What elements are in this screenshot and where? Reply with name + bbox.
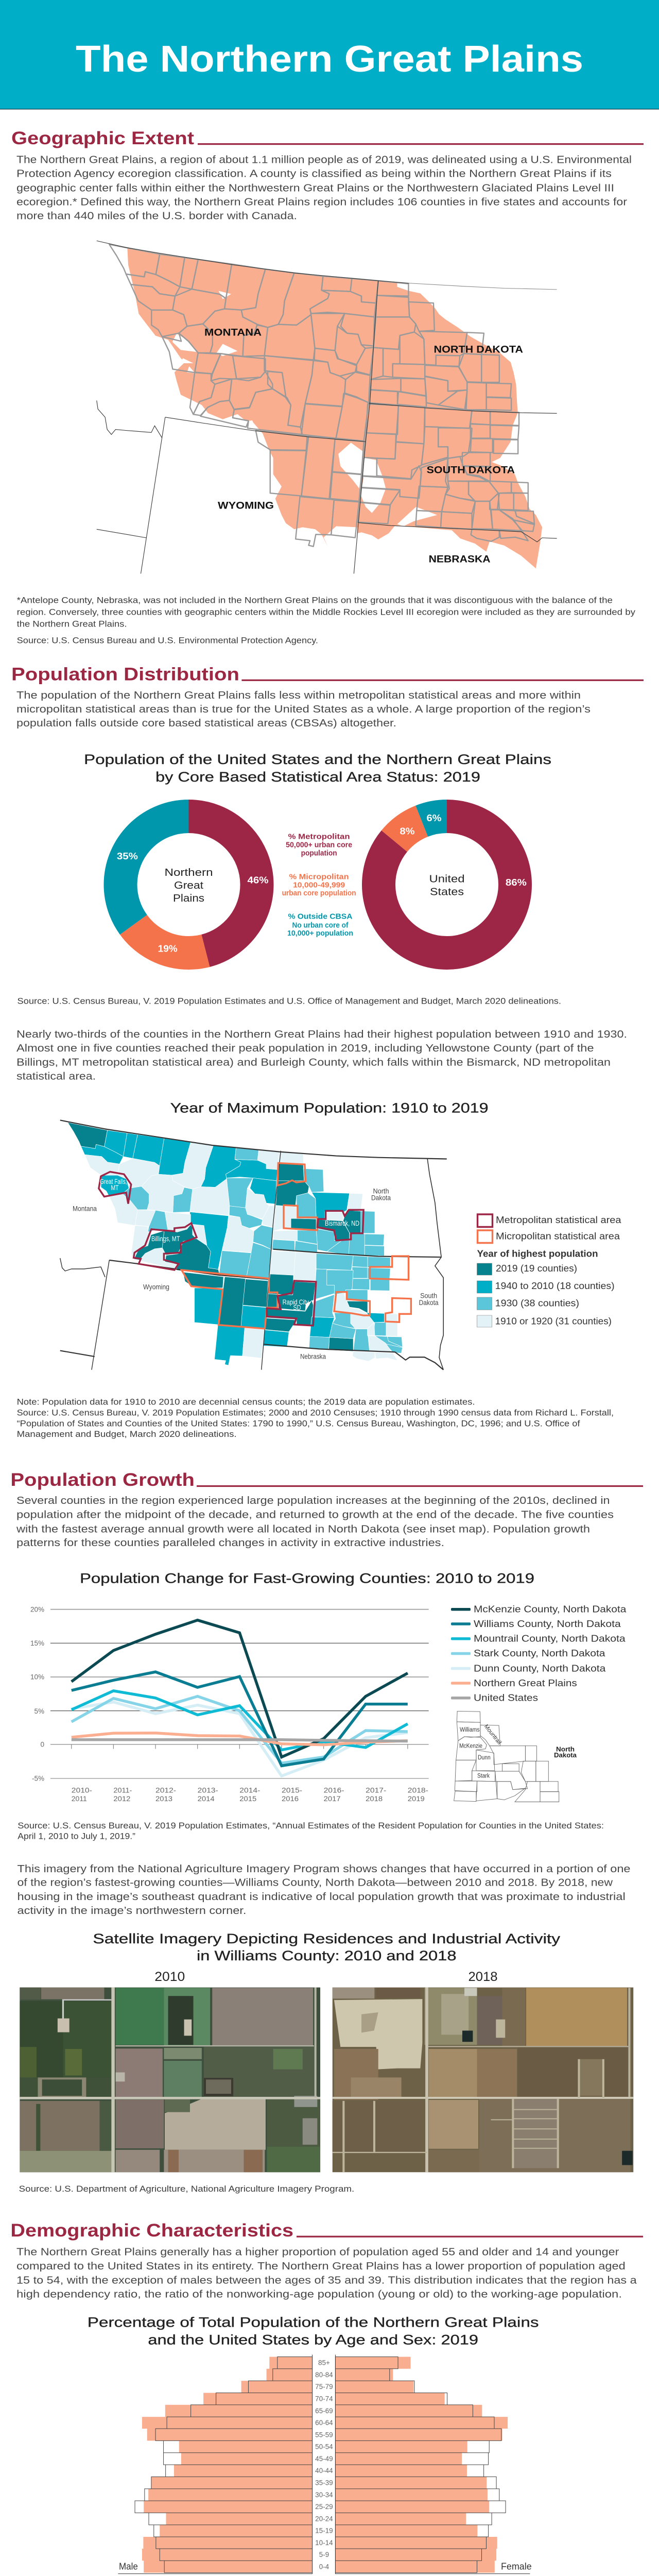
y axis labels: -5% xyxy=(32,1775,44,1783)
inset labels: Dunn xyxy=(478,1755,491,1761)
chart title: population change: Population Change for Fast-Growing Counties: 2010 to 2019 xyxy=(80,1570,534,1586)
year labels: 2018 xyxy=(469,1970,497,1984)
state labels xyxy=(204,328,523,565)
donut legend: No urban core of xyxy=(292,921,349,929)
donut legend: 10,000-49,999 xyxy=(293,880,345,889)
inset counties xyxy=(454,1711,559,1802)
map legend: year of highest population: Year of highest population xyxy=(477,1248,598,1259)
note and source: maximum population xyxy=(17,1397,614,1439)
text block: maximum population: Almost one in five counties reached their peak population in 2019, including Yellowstone County (part of the xyxy=(16,1043,594,1054)
source: line chart: April 1, 2010 to July 1, 2019.” xyxy=(18,1832,135,1841)
metropolitan outlines xyxy=(99,1172,363,1326)
state labels: NORTH DAKOTA xyxy=(433,344,523,355)
donut legend: % Metropolitan xyxy=(288,832,350,841)
text block: maximum population: Nearly two-thirds of the counties in the Northern Great Plains had their highest population between 1910 and 1930. xyxy=(16,1029,627,1040)
x axis labels: 2016 xyxy=(282,1795,299,1803)
donut chart: United States: United xyxy=(429,874,464,885)
y axis labels xyxy=(30,1605,44,1783)
age labels: 75-79 xyxy=(315,2383,333,2391)
footnote: Antelope County: region. Conversely, three counties with geographic centers within the Middle Rockies Level III ecoregion were included as they are surrounded by xyxy=(17,607,636,617)
footnote: Antelope County: *Antelope County, Nebraska, was not included in the Northern Great Plains on the grounds that it was discontiguous with the balance of the xyxy=(17,595,613,605)
y axis labels: 15% xyxy=(30,1639,44,1647)
line chart legend xyxy=(451,1604,627,1703)
state labels: MONTANA xyxy=(204,328,262,338)
text block: imagery: This imagery from the National Agriculture Imagery Program shows changes that have occurred in a portion of one xyxy=(18,1863,630,1875)
footnote: Antelope County: the Northern Great Plains. xyxy=(17,619,127,629)
age labels: 5-9 xyxy=(319,2551,329,2558)
age labels: 15-19 xyxy=(315,2527,333,2535)
donut legend: 50,000+ urban core xyxy=(286,841,352,849)
footnote: Antelope County xyxy=(17,595,636,646)
age labels: 65-69 xyxy=(315,2407,333,2415)
text block: demographics: 15 to 54, with the exception of males between the ages of 35 and 39. This distribution indicates that the region has a xyxy=(16,2275,637,2286)
year labels xyxy=(154,1970,497,1984)
line chart legend: Williams County, North Dakota xyxy=(474,1619,621,1629)
text block: maximum population xyxy=(16,1029,627,1082)
county fills by peak year xyxy=(67,1123,403,1365)
text block: geographic extent intro: more than 440 miles of the U.S. border with Canada. xyxy=(16,210,297,222)
x axis labels: 2015 xyxy=(239,1795,256,1803)
metro labels: Great Falls, xyxy=(100,1177,127,1185)
x axis labels: 2012- xyxy=(155,1787,176,1794)
line chart legend: Stark County, North Dakota xyxy=(474,1648,606,1658)
text block: population distribution intro xyxy=(16,690,591,729)
county outlines xyxy=(109,244,534,547)
sex labels: Female xyxy=(501,2562,532,2572)
y axis labels: 10% xyxy=(30,1673,44,1681)
donut chart: United States xyxy=(379,813,527,953)
inset labels: McKenzie xyxy=(459,1743,482,1750)
age labels: 0-4 xyxy=(319,2563,330,2571)
age labels: 70-74 xyxy=(315,2395,333,2403)
chart title: population pyramid xyxy=(88,2315,539,2347)
metro labels xyxy=(100,1177,359,1312)
heading: Demographic Characteristics: Demographic Characteristics xyxy=(10,2221,293,2241)
age labels: 30-34 xyxy=(315,2491,333,2499)
satellite image: 2018 xyxy=(333,1988,633,2172)
metro labels: Billings, MT xyxy=(151,1234,180,1243)
header banner xyxy=(0,0,659,109)
chart title: year of maximum population: Year of Maximum Population: 1910 to 2019 xyxy=(170,1100,489,1115)
satellite image: 2010 xyxy=(20,1988,320,2172)
state lines xyxy=(97,241,557,573)
age labels: 25-29 xyxy=(315,2503,333,2511)
x axis labels: 2013- xyxy=(198,1787,218,1794)
text block: geographic extent intro xyxy=(16,154,632,222)
text block: demographics: high dependency ratio, the ratio of the nonworking-age population (young or old) to the working-age population. xyxy=(16,2289,622,2300)
donut chart: Northern Great Plains: 46% xyxy=(247,875,269,885)
donut chart: Northern Great Plains: Northern xyxy=(165,867,213,878)
age labels: 80-84 xyxy=(315,2371,333,2379)
inset labels: Stark xyxy=(477,1773,490,1780)
donut chart: Northern Great Plains: Plains xyxy=(173,893,204,904)
text block: population distribution intro: The population of the Northern Great Plains falls less within metropolitan statistical areas and more within xyxy=(16,690,581,701)
x axis labels: 2015- xyxy=(282,1787,302,1794)
donut legend: % Outside CBSA xyxy=(288,912,353,921)
source: line chart xyxy=(18,1821,604,1841)
text block: maximum population: statistical area. xyxy=(16,1071,96,1082)
donut chart: Northern Great Plains: 19% xyxy=(158,944,178,954)
text block: population distribution intro: population falls outside core based statistical areas (CBSAs) altogether. xyxy=(16,718,396,729)
metro labels: Bismarck, ND xyxy=(325,1219,359,1227)
line chart legend: United States xyxy=(474,1693,538,1703)
sex labels xyxy=(119,2562,532,2572)
chart title: population pyramid: and the United States by Age and Sex: 2019 xyxy=(148,2332,478,2347)
x axis labels: 2011 xyxy=(72,1795,87,1803)
text block: geographic extent intro: geographic center falls within either the Northwestern Great Plains or the Northwestern Glaciated Plains Level III xyxy=(16,183,614,194)
population pyramid xyxy=(113,2355,534,2576)
line chart legend: Northern Great Plains xyxy=(474,1678,577,1688)
donut chart: United States: 6% xyxy=(426,813,442,823)
state labels: SOUTH DAKOTA xyxy=(427,465,515,476)
age labels: 50-54 xyxy=(315,2443,333,2451)
map labels: Dakota xyxy=(371,1194,391,1202)
map legend: year of highest population: 1910 or 1920 (31 counties) xyxy=(495,1316,612,1326)
footnote: Antelope County: Source: U.S. Census Bureau and U.S. Environmental Protection Agency. xyxy=(17,636,318,646)
y axis labels: 20% xyxy=(30,1605,44,1614)
line chart legend: Dunn County, North Dakota xyxy=(474,1663,606,1673)
year labels: 2010 xyxy=(154,1970,185,1984)
age labels: 55-59 xyxy=(315,2431,333,2438)
map labels: South xyxy=(420,1291,437,1299)
line chart: population change xyxy=(30,1605,429,1803)
x axis labels: 2017 xyxy=(324,1795,341,1803)
heading: Geographic Extent: Geographic Extent xyxy=(11,128,194,148)
x axis labels: 2011- xyxy=(113,1787,132,1794)
donut legend: urban core population xyxy=(282,889,356,897)
text block: population growth intro: Several counties in the region experienced large population increases at the beginning of the 2010s, declined in xyxy=(16,1495,610,1506)
grid lines and ticks xyxy=(50,1609,429,1778)
donut legend xyxy=(282,832,356,938)
heading: Demographic Characteristics xyxy=(10,2221,643,2241)
inset map: North Dakota xyxy=(454,1711,577,1802)
inset labels: Dakota xyxy=(554,1751,577,1759)
y axis labels: 0 xyxy=(40,1741,44,1749)
donut chart: Northern Great Plains: 35% xyxy=(117,851,138,861)
x axis labels: 2018- xyxy=(408,1787,428,1794)
text block: geographic extent intro: Protection Agency ecoregion classification. A county is classified as being within the Northern Great Plains if its xyxy=(16,168,612,180)
micropolitan outlines xyxy=(182,1163,411,1329)
map legend: year of highest population: 1940 to 2010 (18 counties) xyxy=(495,1281,615,1291)
x axis labels: 2012 xyxy=(113,1795,130,1803)
age labels: 40-44 xyxy=(315,2467,333,2475)
age labels xyxy=(315,2359,333,2571)
x axis labels: 2014- xyxy=(239,1787,260,1794)
inset labels: Mountrail xyxy=(483,1723,502,1746)
chart title: CBSA status: by Core Based Statistical Area Status: 2019 xyxy=(155,769,480,785)
map labels: Nebraska xyxy=(300,1352,326,1360)
x axis labels: 2016- xyxy=(324,1787,344,1794)
map labels: North xyxy=(373,1187,389,1195)
title: The Northern Great Plains xyxy=(76,39,583,80)
age labels: 45-49 xyxy=(315,2455,333,2463)
source: CBSA chart: Source: U.S. Census Bureau, V. 2019 Population Estimates and U.S. Office of Management and Budget, March 2020 delineations. xyxy=(18,997,561,1006)
map labels: Dakota xyxy=(419,1298,439,1307)
chart title: satellite imagery xyxy=(93,1931,561,1963)
donut chart: United States: 86% xyxy=(506,877,527,888)
age labels: 60-64 xyxy=(315,2419,333,2427)
map legend: year of highest population: 1930 (38 counties) xyxy=(495,1298,579,1308)
donut chart: Northern Great Plains: Great xyxy=(174,880,203,891)
chart title: CBSA status: Population of the United States and the Northern Great Plains xyxy=(84,752,551,767)
text block: demographics: compared to the United States in its entirety. The Northern Great Plains has a lower proportion of population aged xyxy=(16,2261,626,2272)
age labels: 10-14 xyxy=(315,2539,333,2547)
map legend: year of highest population: 2019 (19 counties) xyxy=(496,1263,577,1274)
inset labels xyxy=(459,1723,577,1780)
map labels xyxy=(73,1187,439,1360)
metro labels: MT xyxy=(111,1183,119,1192)
text block: imagery: of the region’s fastest-growing counties—Williams County, North Dakota—between 2010 and 2018. By 2018, new xyxy=(18,1877,613,1889)
inset labels: Williams xyxy=(460,1727,480,1733)
text block: imagery: housing in the image’s southeast quadrant is indicative of local population growth that was proximate to industrial xyxy=(18,1891,626,1903)
note and source: maximum population: “Population of States and Counties of the United States: 1790 to 1990,” U.S. Census Bureau, Washington, DC, 1996; and U.S. Office of xyxy=(17,1419,580,1428)
donut legend: % Micropolitan xyxy=(289,873,349,882)
x axis labels: 2013 xyxy=(155,1795,172,1803)
text block: population growth intro: patterns for these counties paralleled changes in activity in extractive industries. xyxy=(16,1537,444,1549)
data series xyxy=(72,1620,408,1776)
note and source: maximum population: Note: Population data for 1910 to 2010 are decennial census counts; the 2019 data are population estimates. xyxy=(17,1397,475,1406)
text block: maximum population: Billings, MT metropolitan statistical area) and Burleigh County, which falls within the Bismarck, ND metropolitan xyxy=(16,1057,611,1068)
pyramid bars xyxy=(118,2355,530,2574)
text block: population growth intro: population after the midpoint of the decade, and returned to growth at the end of the decade. The five counties xyxy=(16,1510,614,1521)
text block: population growth intro xyxy=(16,1495,614,1549)
sex labels: Male xyxy=(119,2562,138,2572)
ecoregion area xyxy=(127,248,542,568)
chart title: satellite imagery: Satellite Imagery Depicting Residences and Industrial Activity xyxy=(93,1931,561,1946)
donut chart: United States: States xyxy=(430,886,464,897)
x axis labels xyxy=(72,1787,428,1803)
state labels: WYOMING xyxy=(218,501,274,512)
donut legend: population xyxy=(301,849,337,857)
donut legend: 10,000+ population xyxy=(287,929,353,938)
y axis labels: 5% xyxy=(34,1707,44,1715)
heading: Population Growth xyxy=(10,1470,643,1490)
map: year of maximum population xyxy=(60,1120,447,1370)
x axis labels: 2010- xyxy=(72,1787,92,1794)
state lines xyxy=(60,1120,447,1370)
chart title: CBSA status xyxy=(84,752,551,785)
inset labels: North xyxy=(556,1745,575,1753)
donut chart: Northern Great Plains xyxy=(117,816,269,954)
heading: Population Distribution xyxy=(11,664,644,684)
note and source: maximum population: Source: U.S. Census Bureau, V. 2019 Population Estimates; 2000 and 2010 Censuses; 1910 through 1990 census data from Richard L. Forstall, xyxy=(17,1409,614,1418)
map labels: Wyoming xyxy=(143,1283,169,1291)
map labels: Montana xyxy=(73,1205,97,1213)
state labels: NEBRASKA xyxy=(429,554,491,565)
x axis labels: 2014 xyxy=(198,1795,215,1803)
map: ecoregion extent xyxy=(97,241,557,573)
map legend: year of highest population: Micropolitan statistical area xyxy=(496,1231,620,1242)
text block: demographics: The Northern Great Plains generally has a higher proportion of population aged 55 and older and 14 and younger xyxy=(16,2247,619,2258)
line chart legend: Mountrail County, North Dakota xyxy=(474,1634,626,1644)
donut chart: United States: 8% xyxy=(400,826,415,837)
text block: population distribution intro: micropolitan statistical areas than is true for the United States as a whole. A large proportion of the region’s xyxy=(16,704,591,715)
text block: imagery xyxy=(18,1863,630,1917)
heading: Population Distribution: Population Distribution xyxy=(11,664,239,684)
x axis labels: 2017- xyxy=(366,1787,386,1794)
metro labels: SD xyxy=(293,1303,301,1312)
heading: Geographic Extent xyxy=(11,128,644,148)
heading: Population Growth: Population Growth xyxy=(10,1470,195,1490)
age labels: 35-39 xyxy=(315,2479,333,2486)
text block: geographic extent intro: The Northern Great Plains, a region of about 1.1 million people as of 2019, was delineated using a U.S. Environmental xyxy=(16,154,632,165)
line chart legend: McKenzie County, North Dakota xyxy=(474,1604,627,1615)
text block: imagery: activity in the image’s northwestern corner. xyxy=(18,1905,246,1917)
x axis labels: 2019 xyxy=(408,1795,425,1803)
text block: demographics xyxy=(16,2247,637,2300)
age labels: 20-24 xyxy=(315,2515,333,2522)
source: imagery: Source: U.S. Department of Agriculture, National Agriculture Imagery Program. xyxy=(19,2184,354,2194)
note and source: maximum population: Management and Budget, March 2020 delineations. xyxy=(17,1430,237,1439)
map legend: year of highest population xyxy=(477,1214,622,1327)
chart title: satellite imagery: in Williams County: 2010 and 2018 xyxy=(197,1948,456,1963)
text block: population growth intro: with the fastest average annual growth were all located in North Dakota (see inset map). Population growth xyxy=(16,1523,590,1535)
x axis labels: 2018 xyxy=(366,1795,383,1803)
chart title: population pyramid: Percentage of Total Population of the Northern Great Plains xyxy=(88,2315,539,2330)
age labels: 85+ xyxy=(318,2359,330,2367)
metro labels: Rapid City, xyxy=(283,1298,310,1306)
source: line chart: Source: U.S. Census Bureau, V. 2019 Population Estimates, “Annual Estimates of the Resident Population for Counties in the United States: xyxy=(18,1821,604,1831)
text block: geographic extent intro: ecoregion.* Defined this way, the Northern Great Plains region includes 106 counties in five states and accounts for xyxy=(16,197,627,208)
map legend: year of highest population: Metropolitan statistical area xyxy=(496,1215,622,1225)
